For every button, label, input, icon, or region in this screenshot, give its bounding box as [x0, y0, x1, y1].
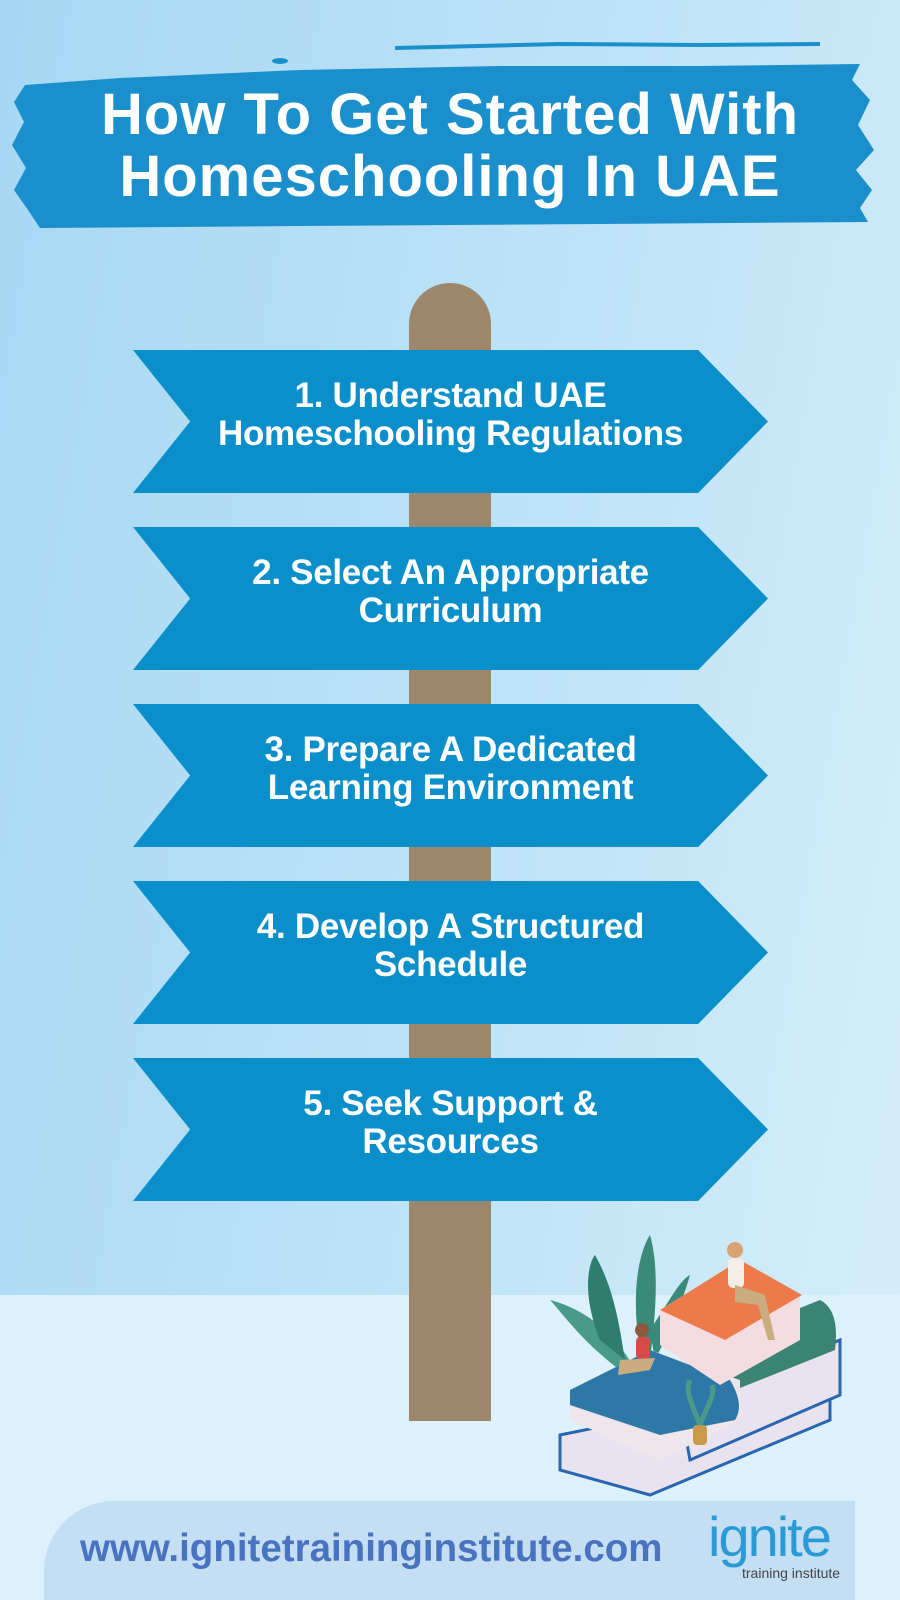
website url: www.ignitetraininginstitute.com [80, 1527, 663, 1570]
arrow 5: 5. Seek Support & [303, 1084, 598, 1122]
arrow 2 [133, 527, 768, 670]
footer band [44, 1501, 855, 1600]
arrow 4: Schedule [374, 944, 527, 984]
arrow 3: Learning Environment [268, 768, 633, 806]
title banner: How To Get Started With [101, 82, 799, 147]
arrow 1 [133, 350, 768, 493]
illustration: books with readers [550, 1235, 842, 1497]
signpost pole [409, 283, 491, 1421]
logo: training institute [742, 1565, 840, 1581]
arrow 2: 2. Select An Appropriate [252, 552, 649, 592]
arrow 5 [133, 1058, 768, 1201]
arrow 1: 1. Understand UAE [295, 376, 606, 414]
arrow 4: 4. Develop A Structured [257, 906, 644, 946]
title banner [12, 42, 874, 228]
arrow 2: Curriculum [359, 590, 542, 630]
arrow 5: Resources [362, 1122, 539, 1160]
arrow 3: 3. Prepare A Dedicated [264, 730, 637, 768]
logo: ignite [708, 1505, 830, 1568]
arrow 3 [133, 704, 768, 847]
arrow 1: Homeschooling Regulations [218, 414, 683, 452]
arrow 4 [133, 881, 768, 1024]
title banner: Homeschooling In UAE [119, 144, 781, 209]
